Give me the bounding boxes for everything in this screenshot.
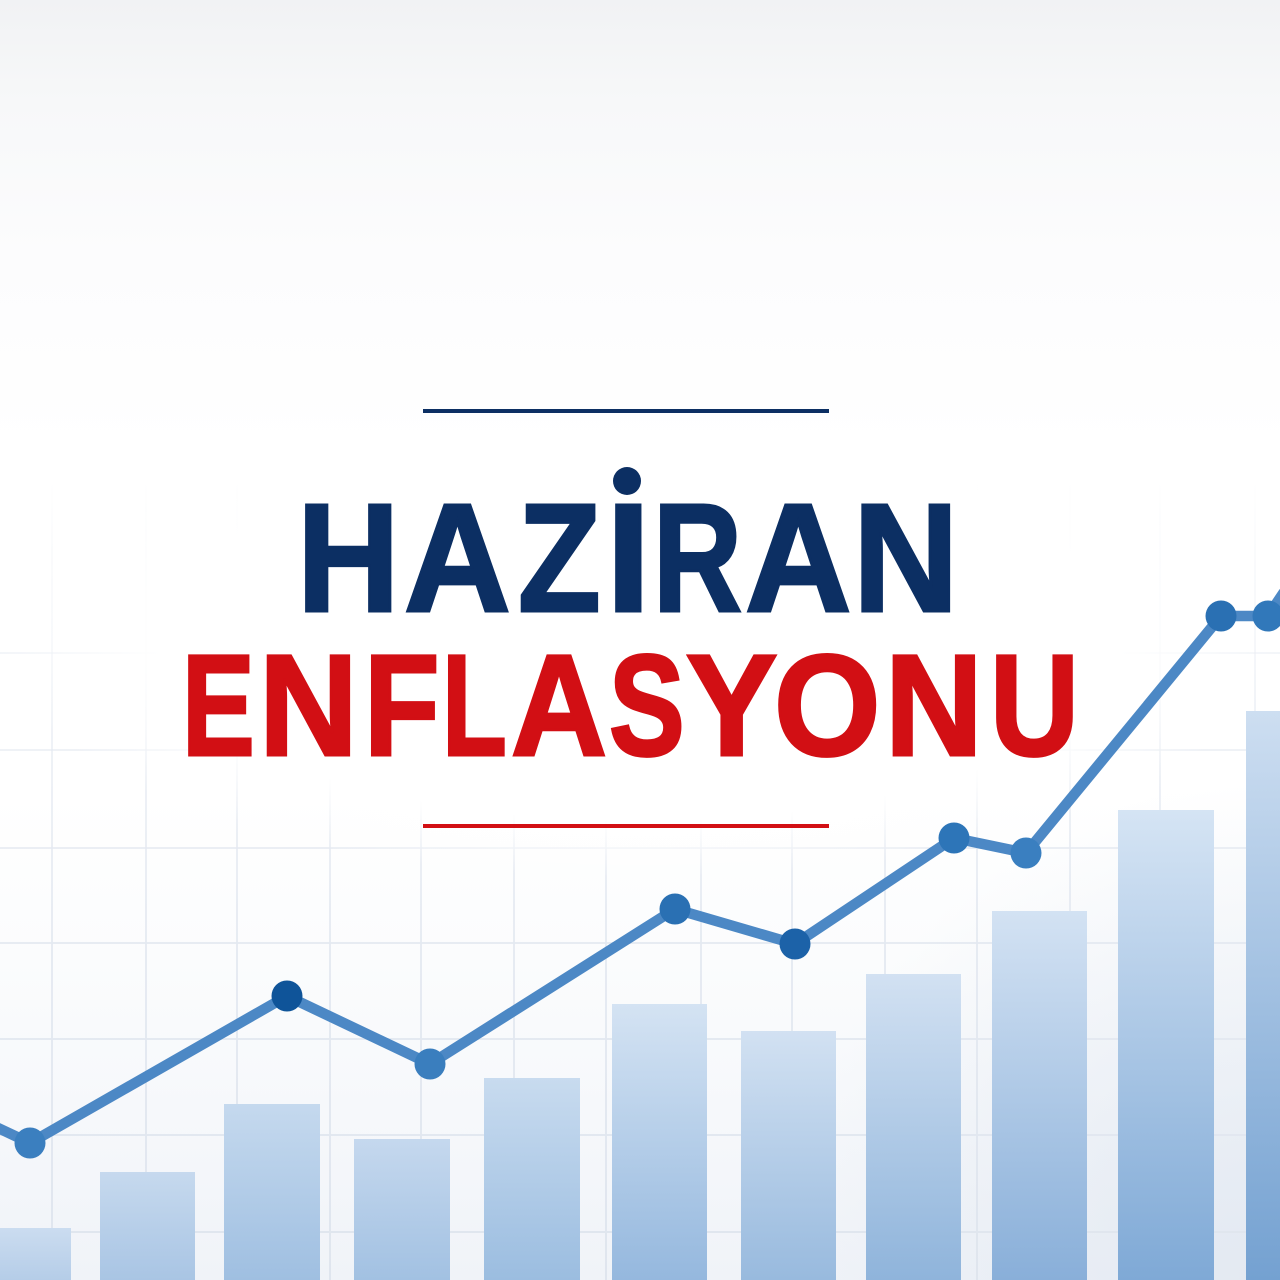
- title: Enflasyonu: [182, 625, 1079, 786]
- bottom divider line: [423, 824, 829, 828]
- title: Enflasyonu: A: [511, 625, 607, 786]
- top divider line: [423, 409, 829, 413]
- title: Haziran: R: [652, 472, 741, 644]
- title: Haziran: [296, 467, 958, 644]
- title: Enflasyonu: O: [774, 625, 880, 786]
- title block: [188, 467, 1073, 758]
- title: Enflasyonu: N: [885, 625, 983, 786]
- title: Enflasyonu: Y: [686, 625, 778, 786]
- title: Enflasyonu: U: [990, 625, 1079, 786]
- title: Enflasyonu: L: [442, 625, 507, 786]
- title: Haziran: A: [404, 472, 511, 644]
- title: Haziran: A: [745, 472, 852, 644]
- title: Haziran: H: [296, 472, 399, 644]
- title: Enflasyonu: S: [609, 625, 684, 786]
- title: Enflasyonu: N: [259, 625, 358, 786]
- title: Enflasyonu: F: [364, 625, 440, 786]
- title: Haziran: Z: [518, 472, 600, 644]
- title: Enflasyonu: E: [182, 625, 254, 786]
- title: Haziran: İ: [606, 472, 651, 644]
- line chart: [0, 592, 1280, 1158]
- title: Haziran: N: [853, 472, 958, 644]
- bar chart: [0, 711, 1280, 1280]
